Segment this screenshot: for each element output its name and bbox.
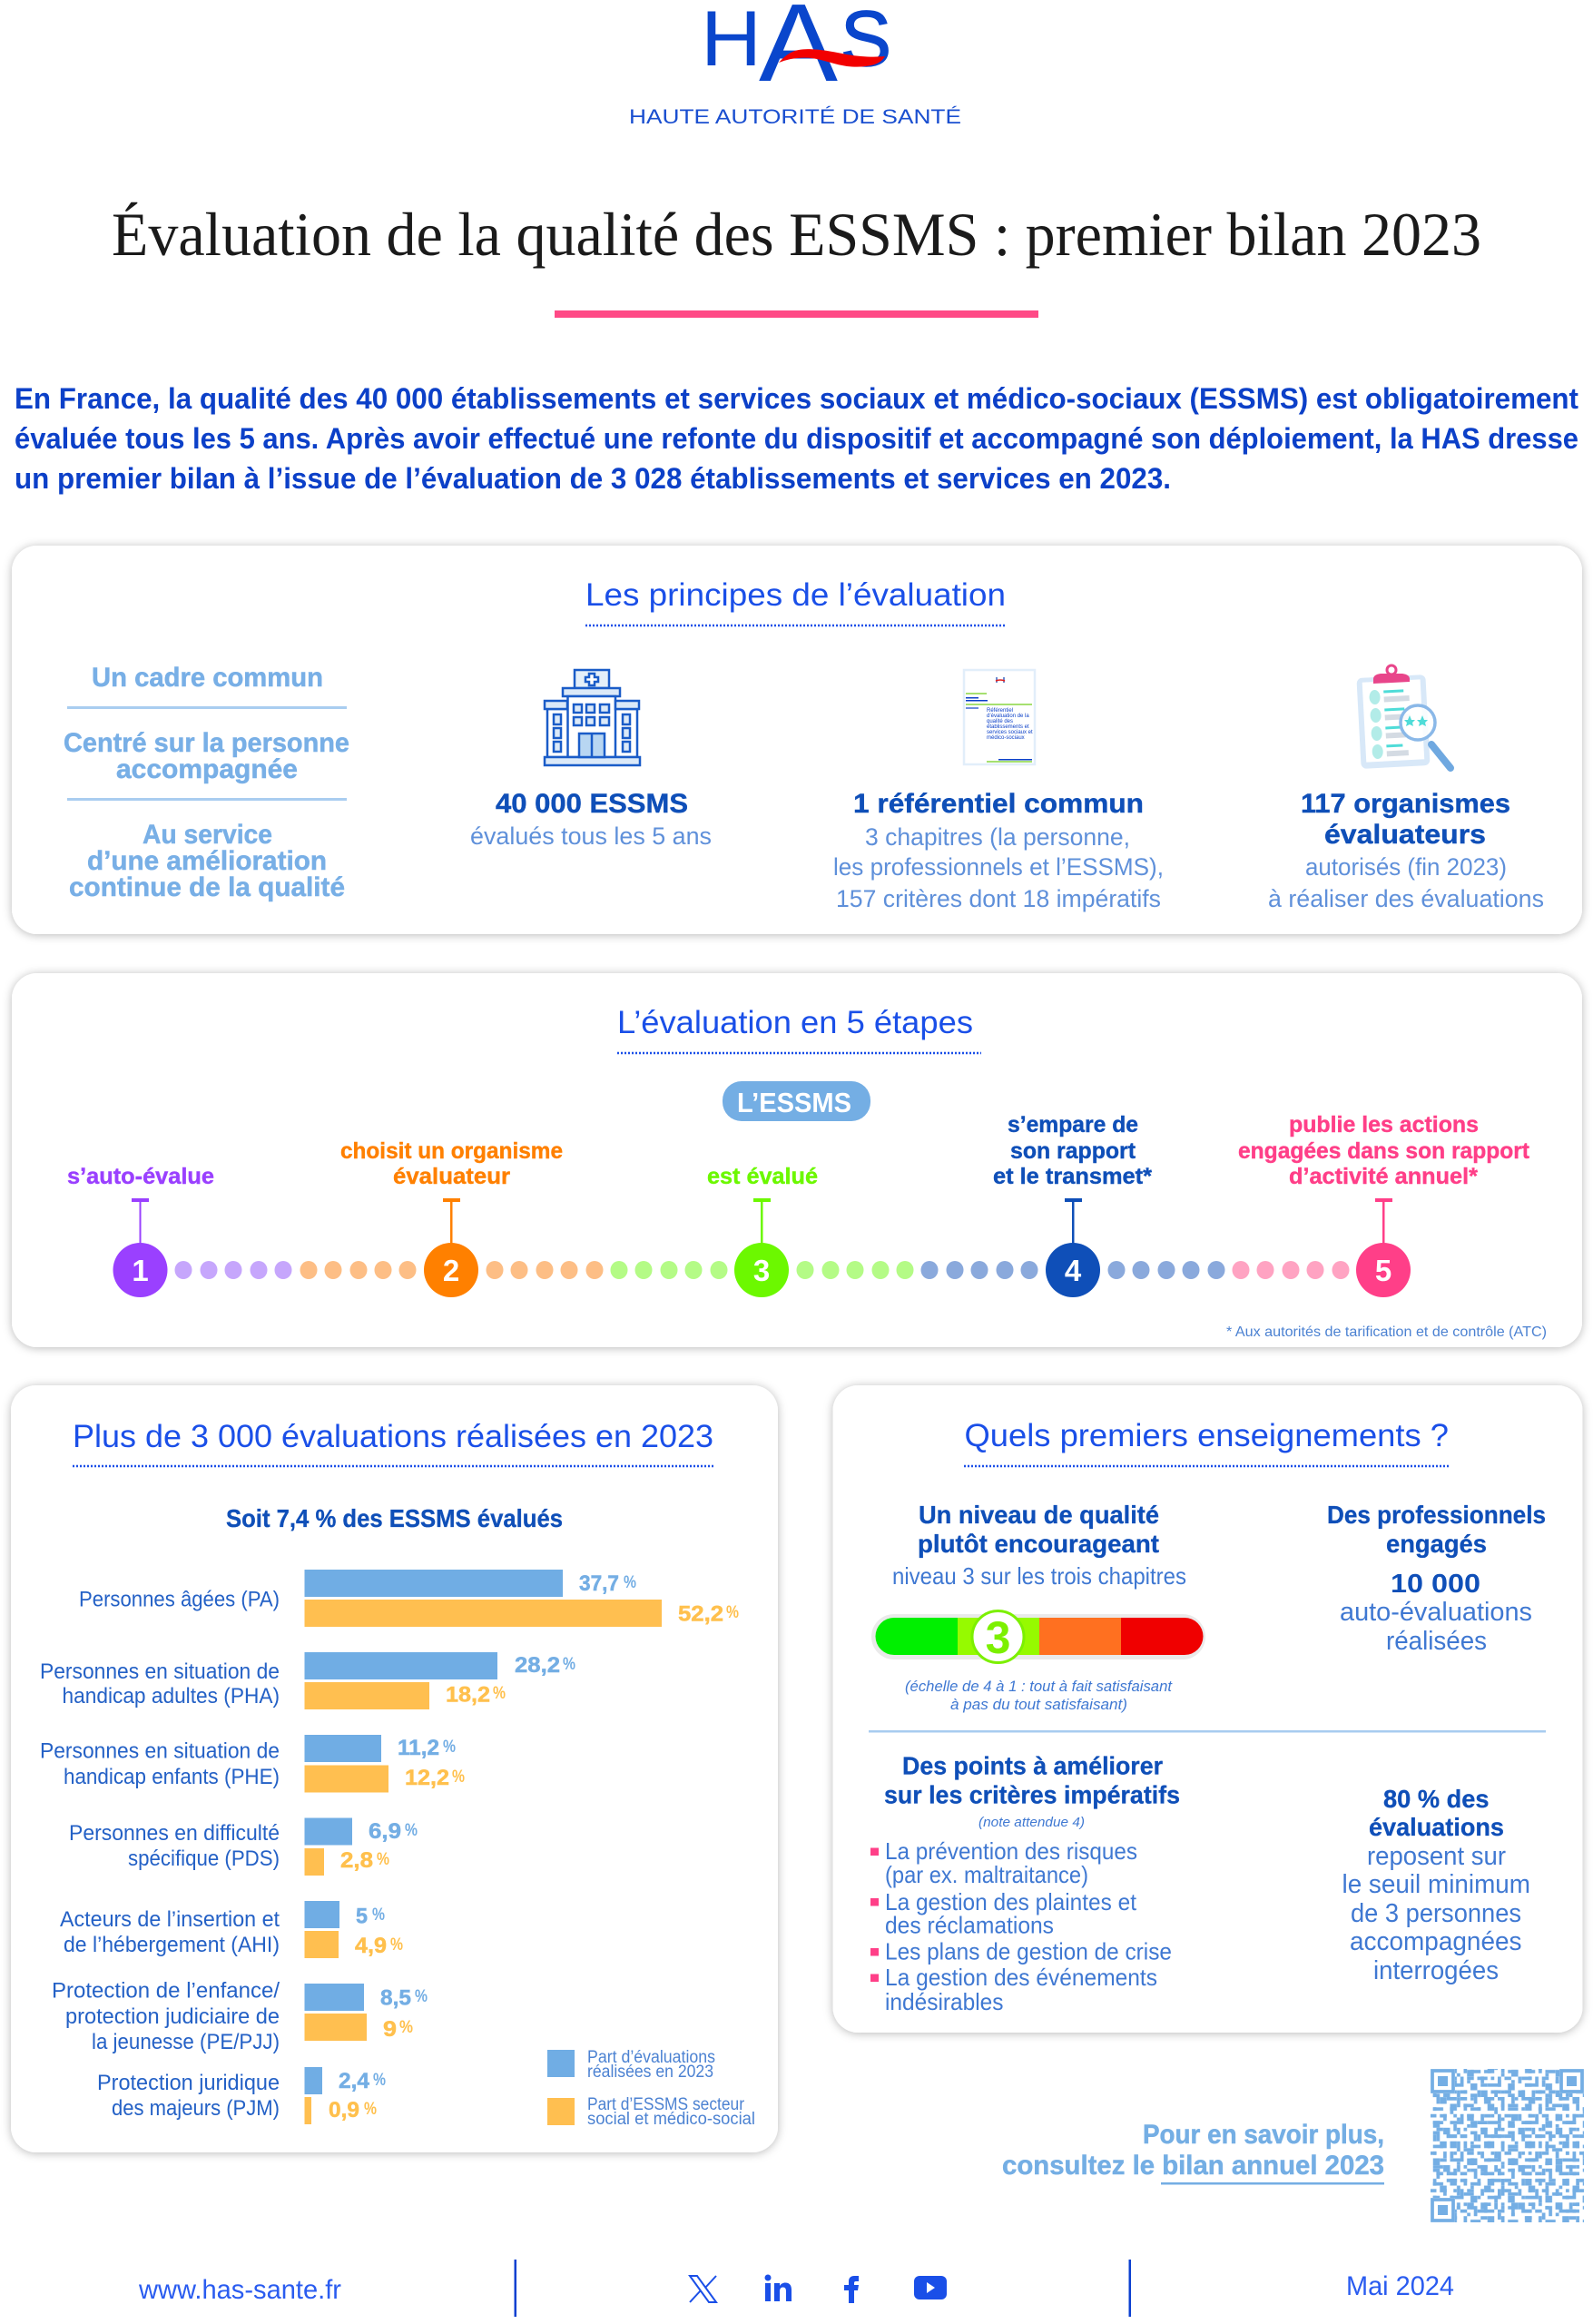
row: insertion et hébergement: %: [390, 1935, 403, 1955]
gauge: niveau 3: [871, 1610, 1205, 1663]
icon: YouTube: [914, 2276, 947, 2299]
row: insertion et hébergement: de l’hébergement (AHI): [64, 1933, 280, 1957]
step 5: 5: [1375, 1254, 1391, 1287]
legend: social et médico-social: [587, 2110, 755, 2129]
left column: three principles: d’une amélioration: [87, 846, 327, 876]
block: 80 % des évaluations: évaluations: [1369, 1813, 1504, 1841]
legend: réalisées en 2023: [587, 2063, 713, 2082]
row: handicap enfants: Personnes en situation de: [40, 1739, 280, 1763]
introduction text: évaluée tous les 5 ans. Après avoir effectué une refonte du dispositif et accompagné son déploiement, la HAS dresse: [15, 422, 1578, 455]
pill: L'ESSMS: L’ESSMS: [737, 1087, 851, 1118]
left column: three principles: Un cadre commun: [92, 663, 323, 693]
legend: Part d’ESSMS secteur: [587, 2095, 745, 2114]
stat: 117 organismes évaluateurs: évaluateurs: [1324, 820, 1486, 850]
stat: 1 référentiel commun: 3 chapitres (la personne,: [865, 823, 1130, 851]
block: points à améliorer: Des points à améliorer: [902, 1752, 1163, 1779]
left column: three principles: Centré sur la personne: [64, 728, 349, 758]
block: points à améliorer: sur les critères impératifs: [884, 1781, 1180, 1808]
stat: 1 référentiel commun: 1 référentiel commun: [853, 789, 1144, 819]
list of improvement points: indésirables: [885, 1988, 1004, 2015]
stat: 1 référentiel commun: [833, 789, 1164, 912]
footer: website: www.has-sante.fr: [138, 2275, 341, 2305]
step 3: est évalué: [707, 1164, 818, 1189]
block: 80 % des évaluations: [1342, 1785, 1530, 1985]
block: 80 % des évaluations: de 3 personnes: [1351, 1899, 1521, 1928]
legend: [547, 2048, 755, 2129]
icon: clipboard and magnifier: [1356, 665, 1450, 769]
row: protection juridique: [97, 2067, 386, 2124]
row: protection juridique: %: [364, 2100, 377, 2119]
title: Évaluation de la qualité des ESSMS : premier bilan 2023: [112, 200, 1481, 269]
block: niveau de qualité: Un niveau de qualité: [919, 1501, 1159, 1529]
icon: LinkedIn: [764, 2275, 792, 2301]
row: protection juridique: des majeurs (PJM): [112, 2096, 280, 2121]
row: handicap adultes: 28,2: [515, 1653, 560, 1678]
step 5: engagées dans son rapport: [1238, 1138, 1530, 1164]
list of improvement points: Les plans de gestion de crise: [885, 1937, 1172, 1965]
row: protection de l'enfance: la jeunesse (PE/PJJ): [92, 2030, 280, 2054]
panel: les principes de l'évaluation: [12, 546, 1582, 934]
row: handicap enfants: %: [443, 1738, 456, 1757]
block: niveau de qualité: niveau 3 sur les trois chapitres: [892, 1562, 1186, 1590]
stat: 117 organismes évaluateurs: à réaliser des évaluations: [1268, 885, 1544, 912]
step 4: [993, 1112, 1152, 1297]
icon: référentiel document: d’évaluation de la: [987, 714, 1029, 719]
row: protection juridique: %: [373, 2071, 386, 2090]
gauge scale note: [905, 1678, 1173, 1713]
row: handicap adultes: handicap adultes (PHA): [62, 1684, 280, 1709]
icon: Facebook: [844, 2276, 859, 2303]
list of improvement points: La gestion des événements: [885, 1964, 1157, 1991]
row: handicap enfants: 11,2: [398, 1736, 439, 1760]
step 4: s’empare de: [1008, 1112, 1138, 1137]
row: difficulté spécifique: spécifique (PDS): [128, 1846, 280, 1871]
heading: étapes: L’évaluation en 5 étapes: [617, 1005, 973, 1040]
step 4: et le transmet*: [993, 1164, 1152, 1189]
subtitle: Soit 7,4 % des ESSMS évalués: [226, 1504, 563, 1532]
block: 80 % des évaluations: accompagnées: [1350, 1927, 1521, 1956]
row: protection de l'enfance: protection judiciaire de: [65, 2004, 280, 2029]
block: professionnels engagés: 10 000: [1391, 1570, 1480, 1599]
heading: enseignements: Quels premiers enseignements ?: [964, 1418, 1449, 1453]
step 1: s’auto-évalue: [67, 1164, 214, 1189]
block: professionnels engagés: réalisées: [1386, 1627, 1487, 1656]
row: difficulté spécifique: Personnes en difficulté: [69, 1821, 280, 1846]
row: protection de l'enfance: [52, 1979, 428, 2054]
step 2: évaluateur: [393, 1164, 510, 1189]
footnote: * Aux autorités de tarification et de contrôle (ATC): [1226, 1324, 1547, 1340]
stat: 1 référentiel commun: les professionnels et l’ESSMS),: [833, 853, 1164, 881]
icon: référentiel document: qualité des: [987, 719, 1013, 724]
block: 80 % des évaluations: le seuil minimum: [1342, 1870, 1530, 1899]
list of improvement points: des réclamations: [885, 1912, 1054, 1939]
step 5: publie les actions: [1289, 1112, 1479, 1137]
row: personnes âgées: Personnes âgées (PA): [79, 1587, 280, 1612]
block: professionnels engagés: auto-évaluations: [1340, 1598, 1532, 1627]
row: insertion et hébergement: 5: [356, 1905, 368, 1928]
row: difficulté spécifique: [69, 1817, 418, 1876]
call to action: pour en savoir plus: consultez le bilan annuel 2023: [1002, 2151, 1384, 2181]
row: handicap adultes: Personnes en situation de: [40, 1659, 280, 1684]
gauge scale note: à pas du tout satisfaisant): [950, 1696, 1127, 1713]
row: personnes âgées: 37,7: [579, 1571, 619, 1596]
stat: 40 000 ESSMS: 40 000 ESSMS: [496, 789, 688, 819]
panel: l'évaluation en 5 étapes: [12, 973, 1582, 1347]
stat: 40 000 ESSMS: évalués tous les 5 ans: [470, 822, 712, 850]
row: difficulté spécifique: 6,9: [369, 1819, 401, 1844]
heading: évaluations: Plus de 3 000 évaluations réalisées en 2023: [73, 1419, 713, 1454]
list of improvement points: (par ex. maltraitance): [885, 1861, 1088, 1888]
block: professionnels engagés: [1327, 1501, 1546, 1656]
icon: hospital building: [545, 670, 640, 765]
row: handicap adultes: %: [563, 1655, 575, 1674]
row: personnes âgées: %: [726, 1603, 739, 1622]
step 4: 4: [1065, 1254, 1082, 1287]
introduction text: un premier bilan à l’issue de l’évaluation de 3 028 établissements et services en 2023.: [15, 462, 1171, 495]
row: difficulté spécifique: %: [377, 1850, 389, 1869]
row: protection de l'enfance: %: [399, 2018, 413, 2037]
row: handicap adultes: 18,2: [446, 1683, 490, 1707]
row: handicap enfants: [40, 1735, 465, 1792]
left column: three principles: continue de la qualité: [69, 872, 345, 902]
step 1: 1: [132, 1254, 149, 1287]
step 5: d’activité annuel*: [1289, 1164, 1478, 1189]
icon: référentiel document: Référentiel: [987, 708, 1013, 714]
stat: 117 organismes évaluateurs: autorisés (fin 2023): [1305, 853, 1507, 881]
block: 80 % des évaluations: 80 % des: [1383, 1785, 1489, 1813]
row: protection de l'enfance: 9: [383, 2017, 397, 2042]
block: professionnels engagés: engagés: [1386, 1530, 1487, 1558]
heading: principes: Les principes de l’évaluation: [585, 577, 1006, 613]
row: protection juridique: 2,4: [339, 2069, 370, 2093]
stat: 40 000 ESSMS: [470, 789, 712, 850]
step 2: [340, 1138, 563, 1297]
left column: three principles: Au service: [143, 820, 272, 850]
panel: quels premiers enseignements: [833, 1385, 1583, 2033]
legend: Part d’évaluations: [587, 2048, 715, 2067]
row: handicap enfants: %: [452, 1768, 465, 1787]
row: handicap enfants: handicap enfants (PHE): [64, 1765, 280, 1789]
icon: X: [690, 2276, 716, 2302]
row: difficulté spécifique: %: [405, 1821, 418, 1840]
left column: three principles: [64, 663, 349, 902]
row: insertion et hébergement: [60, 1901, 403, 1958]
row: handicap adultes: %: [493, 1684, 506, 1703]
stat: 117 organismes évaluateurs: 117 organismes: [1301, 789, 1510, 819]
row: insertion et hébergement: %: [372, 1905, 385, 1925]
row: personnes âgées: 52,2: [678, 1601, 723, 1627]
block: niveau de qualité: [892, 1501, 1186, 1590]
stat: 117 organismes évaluateurs: [1268, 789, 1544, 912]
list of improvement points: La prévention des risques: [885, 1837, 1137, 1865]
icon: référentiel document: établissements et: [987, 724, 1029, 730]
step 3: [707, 1164, 818, 1297]
logo: HAS: [629, 0, 961, 128]
row: protection de l'enfance: Protection de l’enfance/: [52, 1979, 280, 2003]
block: 80 % des évaluations: interrogées: [1373, 1956, 1499, 1985]
row: insertion et hébergement: 4,9: [355, 1934, 387, 1958]
row: handicap adultes: [40, 1652, 575, 1709]
panel: évaluations réalisées: [11, 1385, 778, 2152]
block: 80 % des évaluations: reposent sur: [1367, 1842, 1506, 1871]
step 2: choisit un organisme: [340, 1138, 563, 1164]
row: personnes âgées: [79, 1570, 739, 1627]
block: professionnels engagés: Des professionnels: [1327, 1501, 1546, 1529]
step 2: 2: [443, 1254, 459, 1287]
title accent bar: [555, 310, 1038, 318]
row: personnes âgées: %: [624, 1573, 636, 1592]
icon: référentiel document: médico-sociaux: [987, 735, 1025, 741]
step 3: 3: [753, 1254, 770, 1287]
introduction text: [15, 382, 1578, 495]
logo: HAS: HAUTE AUTORITÉ DE SANTÉ: [629, 105, 961, 128]
row: handicap enfants: 12,2: [405, 1766, 449, 1790]
block: niveau de qualité: plutôt encourageant: [918, 1530, 1159, 1558]
bar chart: [40, 1570, 739, 2124]
step 5: [1238, 1112, 1530, 1297]
icon: référentiel document: [964, 670, 1035, 764]
left column: three principles: accompagnée: [116, 754, 298, 784]
row: protection juridique: Protection juridique: [97, 2071, 280, 2095]
timeline dots: [174, 1261, 1349, 1279]
gauge scale note: (échelle de 4 à 1 : tout à fait satisfaisant: [905, 1678, 1173, 1695]
QR code: [1431, 2069, 1584, 2222]
pill: L'ESSMS: [723, 1081, 870, 1121]
call to action: pour en savoir plus: [1002, 2120, 1384, 2184]
stat: 1 référentiel commun: 157 critères dont 18 impératifs: [836, 885, 1161, 912]
footer: date: Mai 2024: [1346, 2271, 1454, 2301]
list of improvement points: La gestion des plaintes et: [885, 1888, 1137, 1915]
step 1: [67, 1164, 214, 1297]
step 4: son rapport: [1010, 1138, 1136, 1164]
introduction text: En France, la qualité des 40 000 établissements et services sociaux et médico-sociaux (ESSMS) est obligatoirement: [15, 382, 1578, 415]
row: difficulté spécifique: 2,8: [340, 1848, 373, 1873]
list of improvement points: [870, 1837, 1172, 2015]
icon: référentiel document: services sociaux et: [987, 730, 1033, 735]
gauge: niveau 3: 3: [986, 1612, 1010, 1663]
call to action: pour en savoir plus: Pour en savoir plus,: [1143, 2120, 1384, 2150]
block: points à améliorer: (note attendue 4): [978, 1815, 1085, 1830]
row: insertion et hébergement: Acteurs de l’insertion et: [60, 1907, 280, 1932]
block: points à améliorer: [870, 1752, 1180, 2015]
row: protection de l'enfance: %: [415, 1987, 428, 2006]
row: protection juridique: 0,9: [329, 2098, 359, 2122]
row: protection de l'enfance: 8,5: [380, 1986, 411, 2010]
